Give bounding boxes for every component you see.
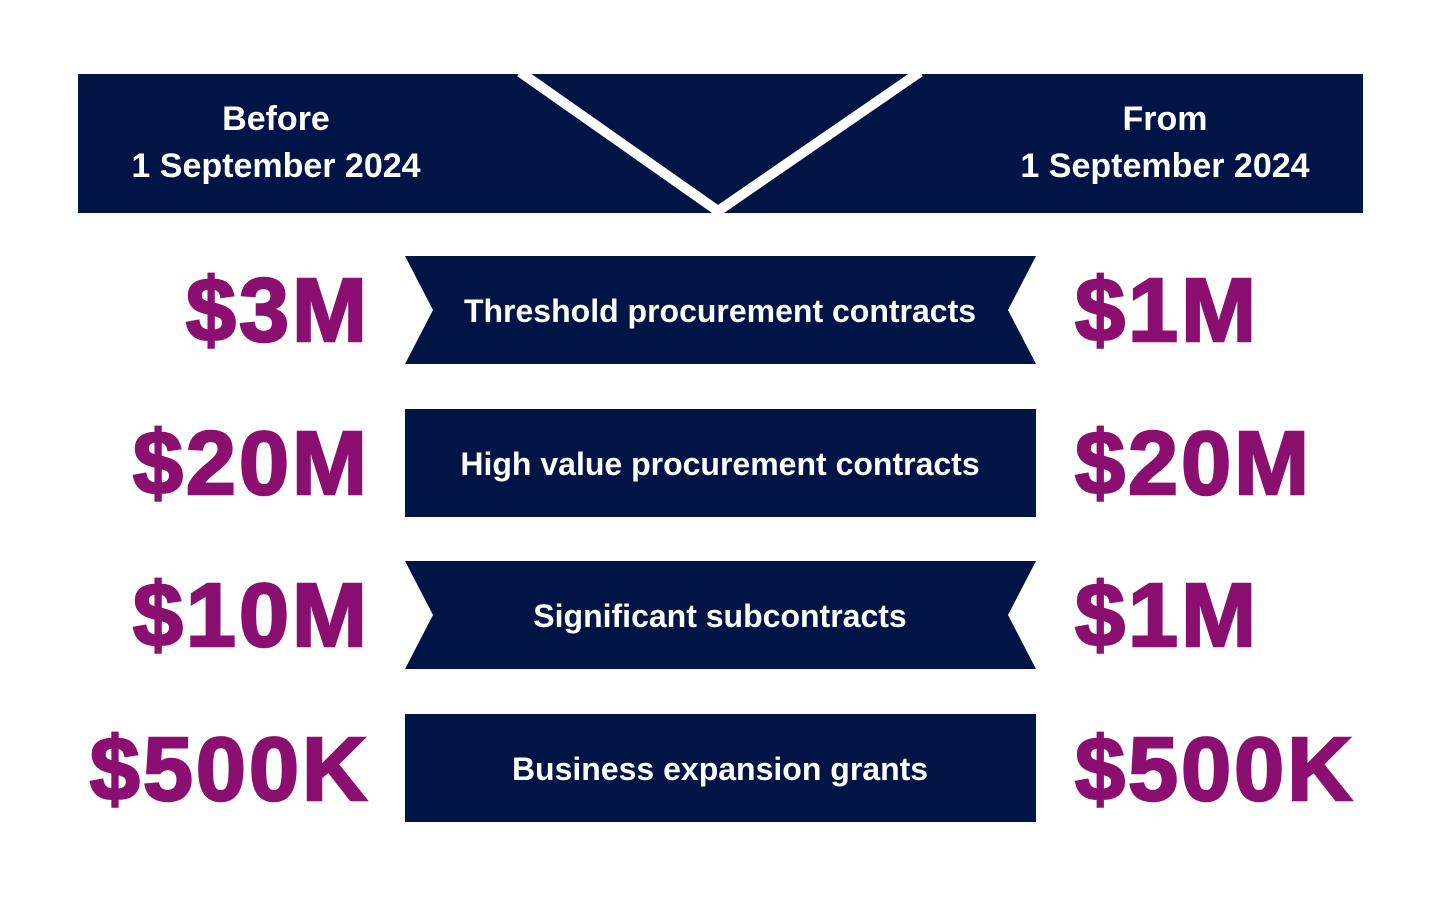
- value before: $10M: [133, 566, 370, 666]
- header divider V: [520, 72, 920, 211]
- header right: From 1 September 2024: 1 September 2024: [1020, 147, 1310, 185]
- header banner: [78, 72, 1363, 213]
- value after: $1M: [1075, 566, 1259, 666]
- value after: $20M: [1075, 414, 1312, 514]
- banner label: [405, 561, 1036, 669]
- row 3: significant subcontracts: [133, 561, 1259, 669]
- banner label: [405, 714, 1036, 822]
- value before: $20M: [133, 414, 370, 514]
- value after: $1M: [1075, 261, 1259, 361]
- banner label: Threshold procurement contracts: [464, 293, 976, 329]
- row 1: threshold procurement contracts: [186, 256, 1259, 364]
- row 2: high value procurement contracts: [133, 409, 1312, 517]
- header left: Before 1 September 2024: [131, 100, 421, 185]
- value before: $500K: [90, 720, 370, 820]
- row 4: business expansion grants: [90, 714, 1355, 822]
- header right: From 1 September 2024: [1020, 100, 1310, 185]
- banner label: Business expansion grants: [512, 751, 928, 787]
- header left: Before 1 September 2024: 1 September 2024: [131, 147, 421, 185]
- value before: $3M: [186, 261, 370, 361]
- banner label: [405, 409, 1036, 517]
- header right: From 1 September 2024: From: [1122, 100, 1208, 138]
- header left: Before 1 September 2024: Before: [222, 100, 330, 138]
- value after: $500K: [1075, 720, 1355, 820]
- banner label: [405, 256, 1036, 364]
- banner label: Significant subcontracts: [533, 598, 907, 634]
- banner label: High value procurement contracts: [460, 446, 980, 482]
